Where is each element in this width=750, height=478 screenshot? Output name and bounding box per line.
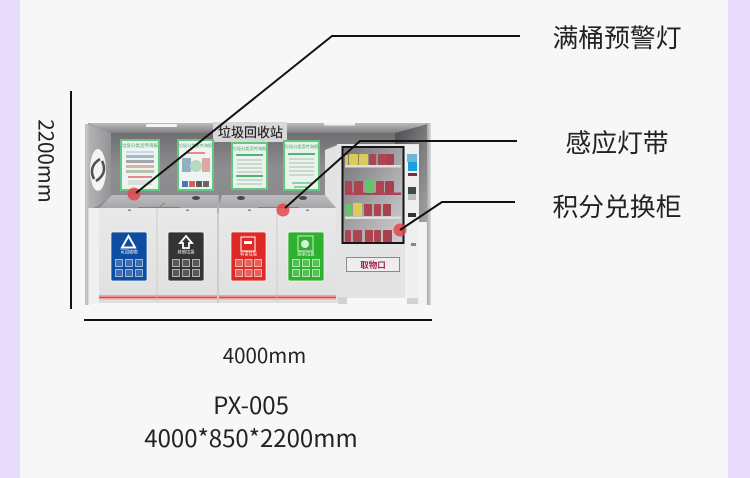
label: 感应灯带: 感应灯带 (565, 123, 669, 160)
callout line: points cabinet (394, 202, 515, 236)
height label: 2200mm (32, 119, 62, 203)
label: dark: 其他垃圾 (177, 248, 195, 256)
cabinet window (342, 147, 404, 243)
bin 1: recyclables (99, 195, 158, 303)
pickup box: 取物口 (346, 258, 400, 272)
label: 积分兑换柜: 积分兑换柜 (552, 187, 682, 224)
callout line: full-bin warning light (128, 36, 520, 200)
poster 1: 垃圾分类宣传海报 (122, 142, 158, 149)
poster 3: 垃圾分类宣传海报 (233, 145, 267, 152)
callout line: light strip (276, 141, 517, 216)
vending cabinet (325, 144, 419, 304)
bin 2: other waste (157, 195, 217, 303)
lid button (299, 196, 307, 200)
poster 4 (283, 140, 320, 191)
poster 4: 垃圾分类宣传海报 (285, 143, 319, 150)
recycling station illustration (85, 122, 431, 305)
bin 4: kitchen waste (277, 195, 336, 303)
label: green: 厨余垃圾 (297, 250, 315, 258)
kiosk shell (85, 123, 431, 305)
wall logo (90, 149, 106, 191)
poster 2 (177, 139, 214, 191)
model dimensions: 4000*850*2200mm (144, 419, 358, 454)
width label: 4000mm (223, 339, 306, 369)
drink cans (345, 154, 394, 242)
model name: PX-005 (213, 386, 289, 421)
lid button (237, 196, 245, 200)
label: blue: 可回收物 (120, 248, 138, 256)
sign: 垃圾回收站: 垃圾回收站 (218, 122, 283, 141)
poster 1 (120, 139, 160, 191)
poster 3 (231, 142, 268, 190)
label: 满桶预警灯: 满桶预警灯 (552, 18, 682, 55)
control panel (405, 145, 419, 298)
poster 2: 垃圾分类宣传海报 (179, 142, 213, 149)
right lilac band (728, 0, 750, 478)
lid button (192, 196, 200, 200)
pickup box: 取物口: 取物口 (360, 259, 386, 271)
width dimension line (84, 319, 432, 321)
left lilac band (0, 0, 20, 478)
label: red: 有害垃圾 (240, 250, 258, 258)
height dimension line (70, 91, 72, 309)
bin 3: hazardous (218, 195, 277, 303)
